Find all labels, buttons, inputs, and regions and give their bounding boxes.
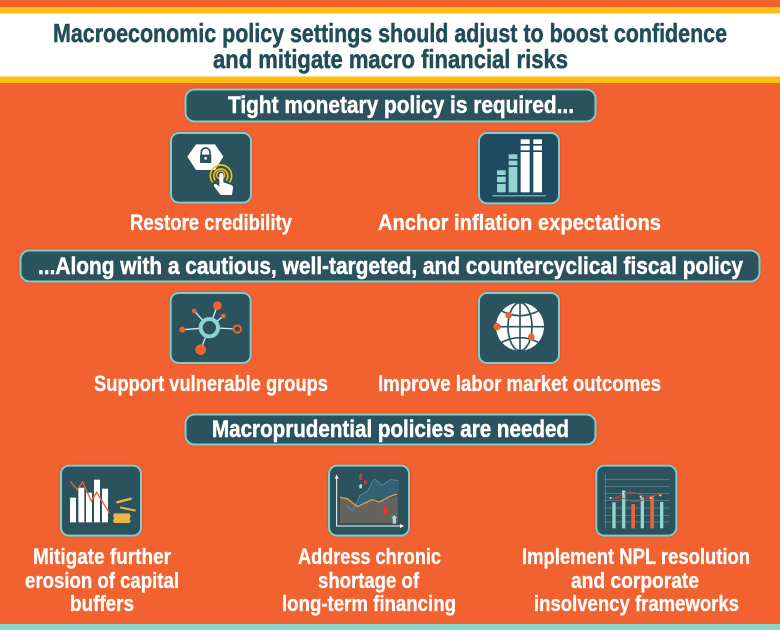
- icon: line chart with arrows: [329, 466, 409, 536]
- icon: lock and touch: [171, 133, 251, 203]
- icon: bars: [479, 133, 559, 203]
- label: restore credibility: Restore credibility: [130, 210, 293, 235]
- label: improve labor market outcomes: Improve labor market outcomes: [378, 371, 661, 396]
- label: anchor inflation expectations: Anchor inflation expectations: [378, 210, 661, 235]
- title: and mitigate macro financial risks: [213, 44, 568, 74]
- label: implement NPL resolution: and corporate: [571, 568, 699, 593]
- heading: macroprudential: Macroprudential policies are needed: [212, 416, 569, 443]
- label: implement NPL resolution: insolvency frameworks: [534, 591, 739, 616]
- icon: network: [171, 293, 251, 363]
- icon: bars and curve: [596, 466, 676, 536]
- icon: globe: [479, 293, 559, 363]
- label: mitigate erosion of capital buffers: [25, 544, 179, 616]
- label: implement NPL resolution: [522, 544, 750, 616]
- heading: tight monetary policy: Tight monetary policy is required...: [228, 92, 574, 119]
- icon: falling bars and coins: [61, 466, 141, 536]
- label: address chronic shortage: Address chronic: [298, 544, 441, 569]
- label: support vulnerable groups: Support vulnerable groups: [94, 371, 328, 396]
- title: [53, 18, 727, 74]
- label: mitigate erosion of capital buffers: buffers: [70, 591, 134, 616]
- label: mitigate erosion of capital buffers: Mitigate further: [33, 544, 171, 569]
- label: mitigate erosion of capital buffers: erosion of capital: [25, 568, 179, 593]
- bottom teal strip: [0, 624, 780, 630]
- top banner: [0, 7, 780, 83]
- label: address chronic shortage: long-term financing: [282, 591, 456, 616]
- label: address chronic shortage: shortage of: [318, 568, 420, 593]
- label: address chronic shortage: [282, 544, 456, 616]
